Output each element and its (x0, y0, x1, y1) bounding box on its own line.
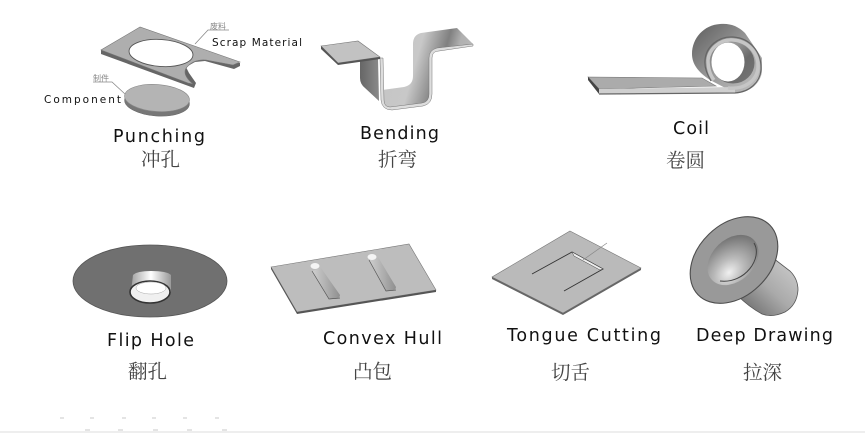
heading: coil chinese: 卷圆 (666, 150, 705, 172)
panel: punching (44, 21, 302, 171)
icon: plate with cut tongue (492, 231, 641, 315)
panel: coil (588, 24, 762, 172)
heading: convex hull: Convex Hull (323, 329, 442, 349)
label: component: Component (44, 94, 121, 106)
heading: coil: Coil (673, 119, 709, 139)
panel: flip hole (73, 245, 227, 383)
icon: deep drawn flanged cup (673, 199, 798, 321)
panel: bending (321, 28, 473, 171)
label: component small chinese: 制件 (93, 73, 109, 83)
heading: convex hull chinese: 凸包 (353, 361, 392, 383)
heading: bending chinese: 折弯 (378, 149, 418, 171)
heading: tongue cutting: Tongue Cutting (506, 326, 661, 346)
heading: deep drawing: Deep Drawing (696, 326, 833, 346)
heading: punching chinese: 冲孔 (141, 149, 180, 171)
heading: flip hole: Flip Hole (107, 331, 194, 351)
icon: punched scrap plate (101, 27, 240, 88)
icon: flanged-hole disc (73, 245, 227, 317)
panel: deep drawing (673, 199, 833, 384)
label: scrap small chinese: 废料 (210, 21, 226, 31)
icon: coiled strip (588, 24, 762, 94)
icon: punched disc component (124, 82, 190, 118)
icon: plate with embossed ribs (271, 244, 436, 314)
panel: tongue cutting (492, 231, 661, 384)
heading: deep drawing chinese: 拉深 (743, 362, 782, 384)
leader: component (93, 82, 125, 94)
heading: bending: Bending (360, 124, 439, 144)
heading: tongue cutting chinese: 切舌 (551, 362, 590, 384)
heading: punching: Punching (113, 127, 205, 147)
heading: flip hole chinese: 翻孔 (128, 361, 167, 383)
panel: convex hull (271, 244, 442, 383)
icon: bent sheet (321, 28, 473, 110)
label: scrap material: Scrap Material (212, 37, 302, 49)
leader: scrap material (195, 30, 229, 44)
